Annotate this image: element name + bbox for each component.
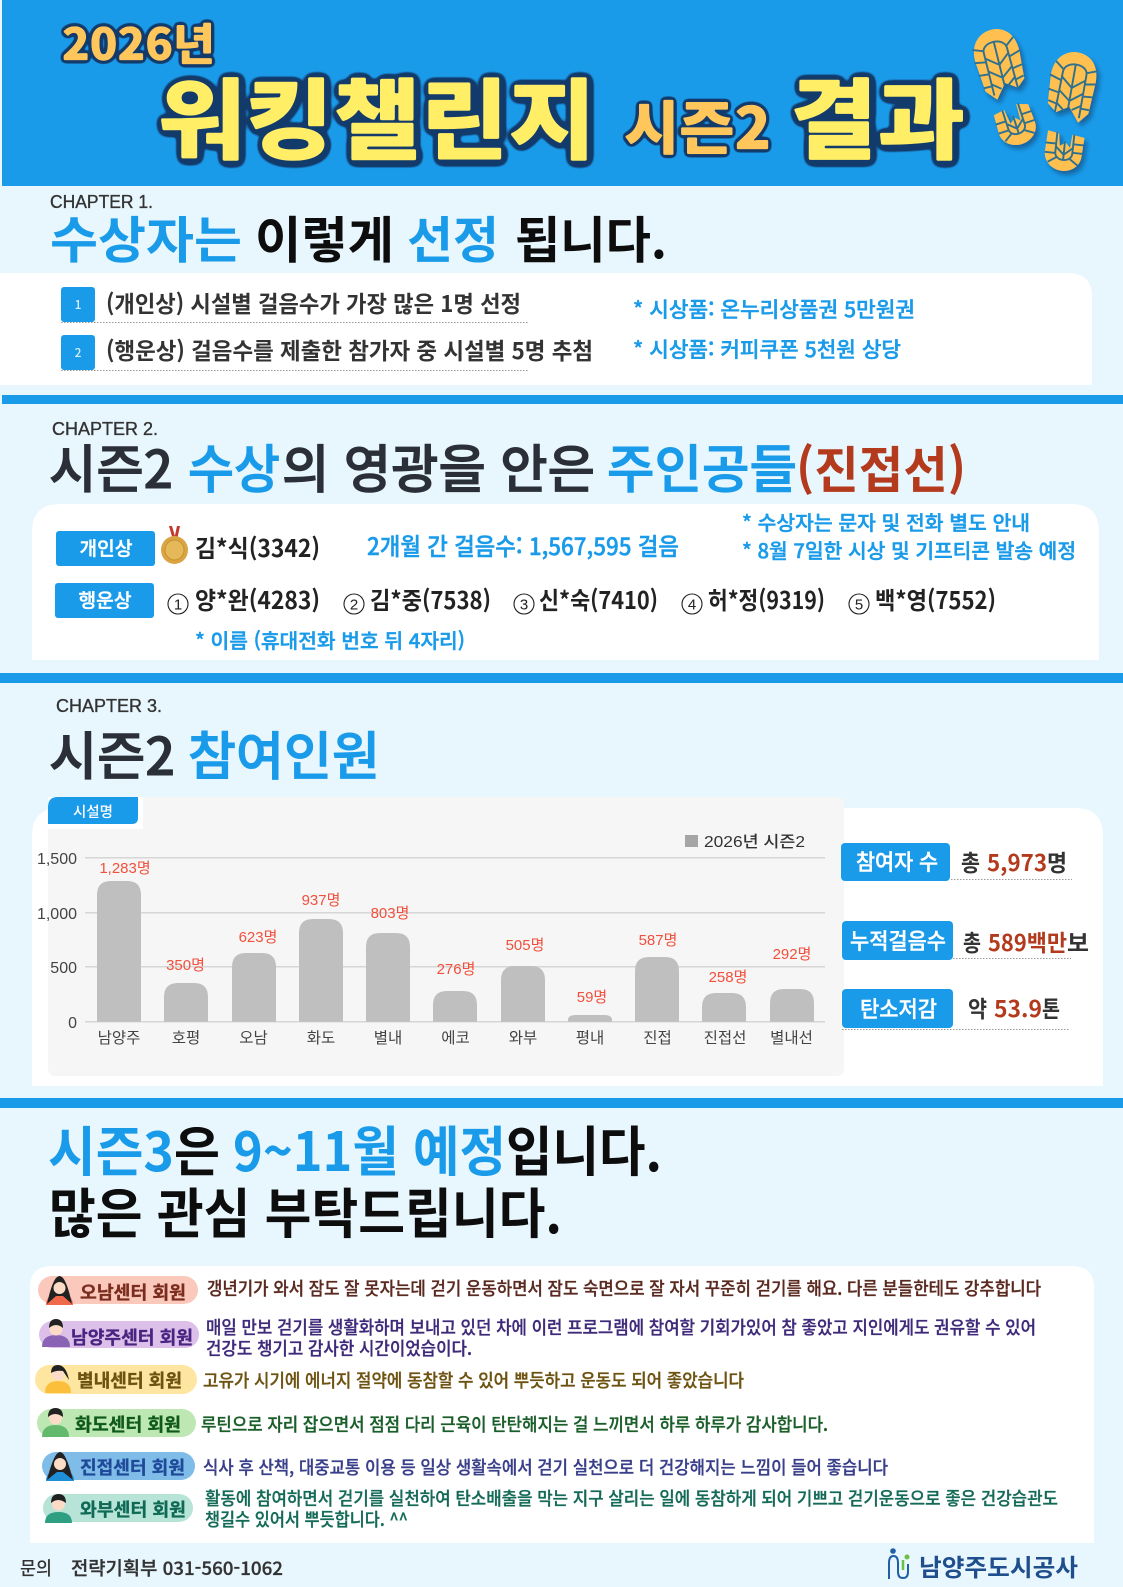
x axis categories: 에코 [441,1029,470,1047]
season 3 announcement: 시즌3 [48,1108,174,1187]
y axis [37,851,77,1032]
x axis categories: 별내선 [770,1029,813,1047]
panel: participant reviews [30,1266,1094,1543]
stat: cumulative steps: 보 [1067,924,1089,958]
result title: 결과 [790,51,965,178]
data labels: 587명 [639,932,677,949]
review: Hwado [37,1408,828,1437]
season 3 announcement: 입니다. [506,1108,662,1187]
review: Onam [38,1275,1041,1305]
review: Onam: 갱년기가 와서 잠도 잘 못자는데 걷기 운동하면서 잠도 숙면으로 잘 자서 꾸준히 걷기를 해요. 다른 분들한테도 강추합니다 [207,1275,1041,1301]
stat: participants: 명 [1047,844,1067,878]
avatar [46,1276,73,1305]
avatar [45,1365,71,1393]
chapter 2 heading: 수상 [188,428,280,503]
x axis categories: 진접 [643,1029,672,1047]
season 3 announcement: 9~11월 예정 [233,1108,506,1187]
header banner [2,0,1123,186]
review: Namyangju: 건강도 챙기고 감사한 시간이었습이다. [206,1335,472,1361]
prize 2: * 시상품: 커피쿠폰 5천원 상당 [633,334,901,364]
panel: participants [32,797,1103,1086]
x axis categories: 진접선 [704,1029,746,1047]
data labels: 276명 [437,961,475,978]
legend: 2026년 시즌2 [704,833,805,851]
stat: participants: 5,973 [987,844,1047,878]
review: Jinjeop: 식사 후 산책, 대중교통 이용 등 일상 생활속에서 걷기 실천으로 더 건강해지는 느낌이 들어 좋습니다 [203,1454,888,1480]
chapter 1 heading: 수상자는 [50,201,242,273]
x axis categories: 와부 [509,1029,537,1047]
stat: cumulative steps: 589백만 [988,924,1067,958]
stat: carbon reduction: 53.9 [994,990,1042,1024]
review: Jinjeop: 진접센터 회원 [80,1454,185,1480]
badge: lucky award [55,583,154,618]
x axis categories: 평내 [576,1029,604,1047]
lucky winners list: 4 [688,596,696,614]
review: Wabu: 챙길수 있어서 뿌듯합니다. ^^ [205,1506,408,1532]
lucky winners list: 백*영(7552) [875,581,996,616]
chapter 1 heading: 됩니다. [515,201,667,273]
badge: lucky award: 행운상 [78,586,132,613]
stat: participants: 참여자 수 [856,845,938,877]
icon: gold medal [161,526,188,564]
chapter 1 label: CHAPTER 1. [50,192,153,212]
chapter 2 heading [49,428,966,503]
logo: 남양주도시공사 [919,1548,1078,1583]
avatar [46,1452,74,1481]
review: Wabu [43,1485,1058,1532]
chapter 1 heading [50,201,667,273]
badge 2 [61,335,95,370]
lucky winners list: 허*정(9319) [708,581,825,616]
data labels: 505명 [506,937,544,954]
x axis categories: 별내 [374,1029,402,1047]
x axis categories: 호평 [172,1029,200,1047]
data labels: 258명 [709,969,747,986]
badge: individual award [56,531,155,566]
panel: winners [32,504,1099,660]
main title: 워킹챌린지 [158,51,596,178]
lucky winners list: 신*숙(7410) [539,581,658,616]
season subtitle: 시즌2 [624,82,771,166]
stat: cumulative steps: 총 [963,924,981,958]
step count: 2개월 간 걸음수: 1,567,595 걸음 [367,527,679,562]
data labels: 803명 [371,905,409,922]
lucky winners list: 1 [174,596,182,614]
review: Byeollae: 별내센터 회원 [77,1367,182,1393]
stat: carbon reduction: 탄소저감 [860,992,937,1024]
x axis categories: 오남 [239,1029,268,1047]
chapter 3 heading: 참여인원 [188,715,380,790]
review: Hwado: 루틴으로 자리 잡으면서 점점 다리 근육이 탄탄해지는 걸 느끼면서 하루 하루가 감사합니다. [201,1411,828,1437]
data labels: 59명 [577,989,607,1006]
contact: 문의 [20,1555,52,1581]
chapter 2 label: CHAPTER 2. [52,419,158,439]
chapter 3 heading: 시즌2 [49,715,175,790]
review: Hwado: 화도센터 회원 [75,1411,181,1437]
stat: participants [841,843,1072,881]
x axis categories: 화도 [307,1029,335,1047]
season 3 announcement: 많은 관심 부탁드립니다. [49,1170,562,1249]
icon: footprints [968,24,1101,173]
notice 2: * 8월 7일한 시상 및 기프티콘 발송 예정 [742,535,1076,564]
badge: individual award: 개인상 [80,534,132,561]
y axis: 1,000 [37,906,77,923]
chapter 3 label: CHAPTER 3. [56,696,162,716]
stat: carbon reduction: 약 [968,990,987,1024]
tab: facility name [48,797,138,824]
review: Byeollae: 고유가 시기에 에너지 절약에 동참할 수 있어 뿌듯하고 운동도 되어 좋았습니다 [203,1367,744,1393]
bar chart [37,797,844,1076]
avatar [42,1408,69,1437]
chapter 1 heading: 선정 [407,201,499,273]
chapter 1 heading: 이렇게 [255,201,394,273]
lucky winners list: 3 [520,596,528,614]
avatar [45,1494,72,1523]
data labels: 623명 [239,929,277,946]
chapter 2 heading: 의 영광을 안은 [282,428,595,503]
icon: logo mark [889,1548,910,1579]
badge 2: 2 [75,344,82,361]
bars [97,881,814,1022]
chapter 3 heading [49,715,380,790]
stat: cumulative steps: 누적걸음수 [850,924,946,956]
stat: carbon reduction [842,989,1070,1030]
lucky winners list: 김*중(7538) [370,581,491,616]
prize 1: * 시상품: 온누리상품권 5만원권 [633,294,915,324]
y axis: 500 [50,960,77,977]
review: Jinjeop [42,1452,888,1481]
lucky winners list [168,581,996,616]
review: Namyangju [39,1314,1036,1361]
contact: 전략기획부 031-560-1062 [71,1555,283,1581]
stat: carbon reduction: 톤 [1042,990,1060,1024]
y axis: 1,500 [37,851,77,868]
year heading: 2026년 [62,9,215,73]
chapter 2 heading: (진접선) [796,431,966,503]
lucky winners list: 양*완(4283) [195,581,320,616]
review: Byeollae [35,1365,744,1394]
review: Namyangju: 매일 만보 걷기를 생활화하며 보내고 있던 차에 이런 프로그램에 참여할 기회가있어 참 좋았고 지인에게도 권유할 수 있어 [206,1314,1036,1340]
data labels: 1,283명 [99,860,151,877]
rule 2 text: (행운상) 걸음수를 제출한 참가자 중 시설별 5명 추첨 [106,332,593,366]
review: Wabu: 와부센터 회원 [80,1496,186,1522]
name format note: * 이름 (휴대전화 번호 뒤 4자리) [195,625,465,654]
winner name: 김*식(3342) [195,529,320,564]
review: Namyangju: 남양주센터 회원 [71,1324,193,1350]
season 3 announcement [48,1108,662,1249]
x axis categories: 남양주 [98,1029,140,1047]
review: Wabu: 활동에 참여하면서 걷기를 실천하여 탄소배출을 막는 지구 살리는 일에 동참하게 되어 기쁘고 걷기운동으로 좋은 건강습관도 [205,1485,1058,1511]
data labels: 292명 [773,946,811,963]
chapter 2 heading: 시즌2 [49,428,173,503]
data labels: 937명 [302,892,340,909]
x axis categories [98,1029,813,1047]
y axis: 0 [68,1015,77,1032]
avatar [42,1319,70,1347]
lucky winners list: 5 [855,596,863,614]
tab: facility name: 시설명 [73,801,113,822]
review: Onam: 오남센터 회원 [80,1279,186,1305]
stat: participants: 총 [961,844,980,878]
stat: cumulative steps [842,921,1089,960]
data labels [99,860,811,1006]
lucky winners list: 2 [350,596,358,614]
badge 1 [61,287,95,322]
badge 1: 1 [75,296,82,313]
panel: selection rules [0,273,1092,385]
notice 1: * 수상자는 문자 및 전화 별도 안내 [742,507,1030,536]
rule 1 text: (개인상) 시설별 걸음수가 가장 많은 1명 선정 [106,285,521,319]
season 3 announcement: 은 [174,1108,220,1187]
chapter 2 heading: 주인공들 [607,428,797,503]
data labels: 350명 [166,957,205,974]
